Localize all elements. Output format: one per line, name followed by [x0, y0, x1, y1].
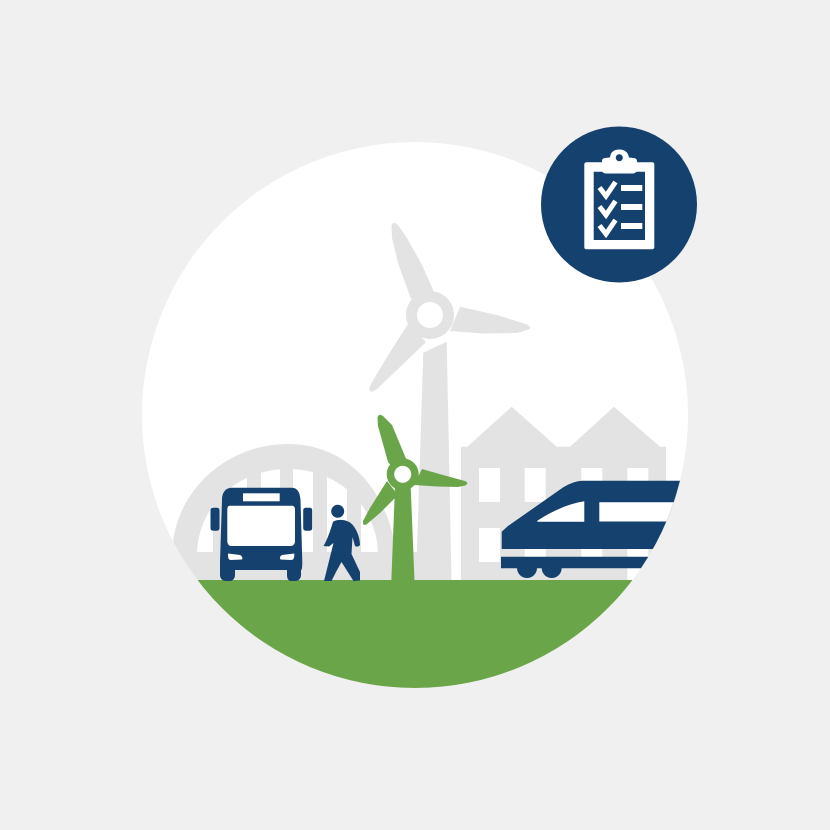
green turbine hub — [387, 458, 419, 490]
bus windscreen — [227, 506, 295, 546]
navy bus — [210, 488, 312, 581]
bus headlights — [228, 554, 294, 560]
checkmarks — [600, 182, 616, 234]
icon: clipboard checklist badge — [541, 126, 697, 282]
green turbine top blade — [378, 415, 407, 468]
gray factory building — [461, 407, 666, 580]
walking person — [324, 505, 360, 581]
clipboard board — [584, 162, 654, 249]
gray arch bridge — [172, 444, 420, 582]
green turbine tower — [391, 487, 414, 581]
infographic: sustainable transport checklist — [142, 126, 697, 688]
bus mirrors — [210, 508, 312, 531]
green wind turbine — [363, 415, 467, 581]
clipboard clip — [602, 150, 637, 174]
bus destination sign — [243, 493, 280, 501]
green turbine left blade — [363, 481, 398, 525]
gray wind turbine — [369, 223, 530, 580]
bus body — [220, 488, 302, 581]
checklist lines — [621, 185, 642, 229]
green turbine right blade — [414, 469, 467, 487]
navy badge circle — [541, 126, 697, 282]
white circle background — [142, 142, 688, 688]
scene clipped to circle — [173, 223, 680, 688]
navy train — [501, 481, 700, 578]
green ground — [198, 580, 632, 688]
